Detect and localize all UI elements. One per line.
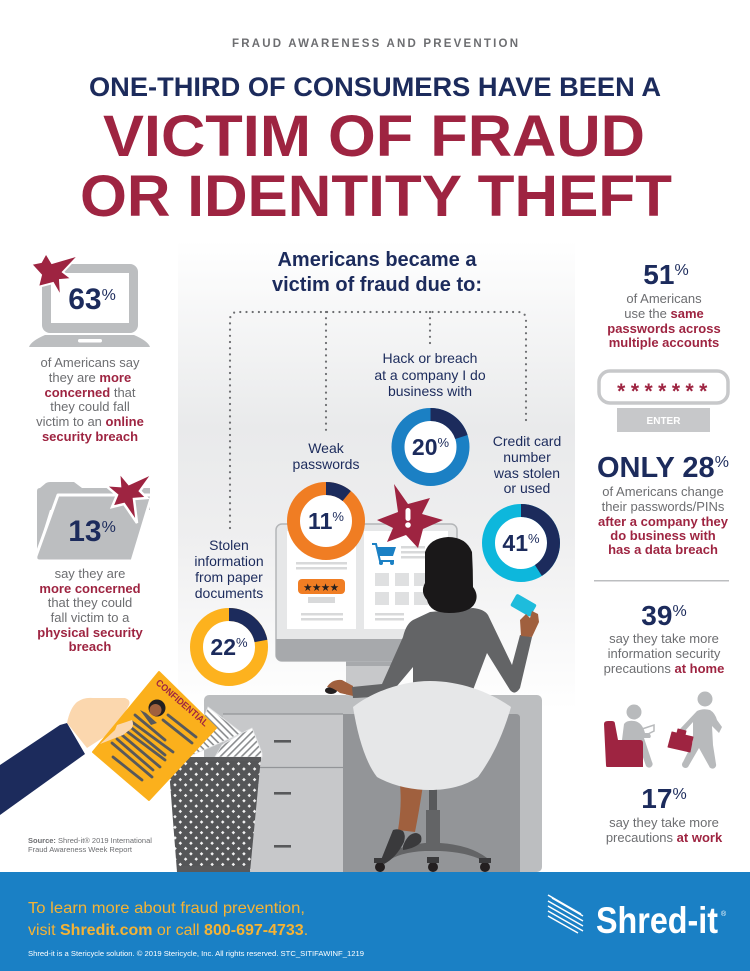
- text: same passwords: passwords across: [607, 321, 721, 336]
- photo: [140, 700, 166, 725]
- text: source: Fraud Awareness Week Report: [28, 845, 133, 854]
- logo: Shred-it: Shred-it: [596, 900, 718, 941]
- text: physical concern: say they are: [55, 566, 125, 581]
- text: online concern: of Americans say: [40, 355, 140, 370]
- icon: star on laptop: [31, 253, 79, 297]
- stat: only 28%: ONLY 28: [597, 452, 715, 484]
- label: stolen info: from paper: [195, 569, 263, 585]
- illustration: confidential document: [93, 672, 216, 800]
- stat: only 28%: %: [715, 454, 729, 471]
- screen: login page: ★★★★: [304, 582, 339, 592]
- hair: [423, 537, 477, 613]
- text: at home: say they take more: [609, 631, 719, 646]
- text: physical concern: breach: [69, 639, 111, 654]
- text lines: [112, 715, 196, 780]
- text: online concern: victim to an online: [36, 414, 144, 429]
- screen: login page: [287, 531, 356, 629]
- text: online concern: security breach: [42, 429, 138, 444]
- papers: [188, 707, 242, 757]
- title: [80, 72, 672, 229]
- donut: credit card: 41: [502, 530, 528, 556]
- text: online concern: concerned that: [44, 385, 136, 400]
- icon: enter button: ENTER: [647, 416, 681, 427]
- title: OR IDENTITY THEFT: [80, 164, 672, 229]
- label: weak passwords: passwords: [293, 456, 359, 472]
- heading: Americans became a victim: victim of fraud due to:: [272, 274, 482, 296]
- stat: 13%: 13: [68, 515, 102, 548]
- text: change passwords: of Americans change: [602, 484, 724, 499]
- donut: hack or breach: [398, 414, 463, 480]
- illustration: desk: [204, 695, 542, 872]
- title: VICTIM OF FRAUD: [103, 104, 645, 169]
- panel: right stats: [594, 259, 729, 845]
- donut: hack or breach: 20: [412, 434, 438, 460]
- mouse hand: [325, 680, 353, 696]
- donut: weak passwords: 11: [308, 508, 332, 534]
- label: stolen info: information: [194, 553, 264, 569]
- screen: shopping page: [364, 531, 448, 629]
- text: change passwords: after a company they: [598, 514, 729, 529]
- stat: 39%: %: [672, 603, 687, 620]
- illustration: woman at desk: [325, 537, 539, 710]
- stat: 63%: %: [102, 287, 116, 304]
- eyebrow heading: FRAUD AWARENESS AND PREVENTION: [232, 38, 518, 50]
- footer call to action: To learn more about fraud prevention,: [28, 900, 305, 917]
- text: source: Source: Shred-it® 2019 International: [28, 836, 152, 845]
- text: change passwords: do business with: [610, 528, 716, 543]
- icon: star on folder: [105, 472, 153, 523]
- donut: weak passwords: %: [332, 509, 344, 524]
- logo: Shred-it: ®: [721, 910, 727, 918]
- text: physical concern: physical security: [37, 625, 144, 640]
- icon: folder: [36, 482, 152, 561]
- text: at home: information security: [608, 646, 721, 661]
- stat: 17%: %: [672, 786, 687, 803]
- label: hack: business with: [388, 383, 472, 399]
- label: stolen info: documents: [195, 585, 263, 601]
- confidential stamp: CONFIDENTIAL: [153, 678, 210, 729]
- holding hand: [520, 611, 539, 637]
- icon: password field: *******: [617, 380, 713, 403]
- footer band: [0, 872, 750, 971]
- text: change passwords: has a data breach: [608, 542, 718, 557]
- torso and arms: [352, 608, 532, 710]
- icon: enter button: [617, 408, 710, 432]
- text: at work: precautions at work: [606, 830, 722, 845]
- text: change passwords: their passwords/PINs: [602, 499, 725, 514]
- label: hack: at a company I do: [374, 367, 486, 383]
- text: physical concern: that they could: [48, 595, 132, 610]
- stat: 51%: %: [674, 262, 689, 279]
- text: at home: precautions at home: [604, 661, 724, 676]
- label: hack: Hack or breach: [383, 350, 477, 366]
- donut: hack or breach: %: [438, 435, 450, 450]
- icon: alert star: [377, 484, 443, 548]
- heading: Americans became a victim: Americans became a: [277, 249, 477, 271]
- icon: laptop: [29, 264, 150, 347]
- text: same passwords: of Americans: [626, 291, 702, 306]
- panel: left stats: [29, 253, 153, 654]
- illustration: thumb: [100, 720, 133, 744]
- stat: 63%: 63: [68, 283, 102, 316]
- icon: password field: [599, 371, 728, 403]
- text: same passwords: use the same: [624, 306, 704, 321]
- stat: 39%: 39: [641, 600, 672, 631]
- donut: stolen paper info: %: [236, 635, 248, 650]
- icon: person reading in armchair: [604, 704, 654, 768]
- text: online concern: they could fall: [50, 399, 130, 414]
- illustration: hand holding document, back part: [0, 698, 130, 815]
- illustration: waste basket: [168, 707, 262, 872]
- text: physical concern: more concerned: [39, 581, 141, 596]
- footer call to action: visit Shredit.com or call 800-697-4733.: [28, 922, 308, 939]
- icon: person walking with briefcase: [668, 692, 722, 769]
- label: credit card: number: [503, 449, 551, 465]
- label: credit card: or used: [504, 480, 550, 496]
- logo: Shred-it: [548, 895, 727, 941]
- label: stolen info: Stolen: [209, 537, 249, 553]
- card: [510, 593, 537, 617]
- stat: 17%: 17: [641, 783, 672, 814]
- donut: credit card: %: [528, 531, 540, 546]
- label: weak passwords: Weak: [308, 440, 345, 456]
- donut: credit card: [488, 510, 554, 576]
- text: at work: say they take more: [609, 815, 719, 830]
- donut: stolen paper info: 22: [210, 634, 236, 660]
- stat: 13%: %: [102, 519, 116, 536]
- title: ONE-THIRD OF CONSUMERS HAVE BEEN A: [89, 72, 661, 102]
- text: same passwords: multiple accounts: [609, 335, 719, 350]
- panel: central background: [178, 240, 575, 710]
- label: credit card: was stolen: [493, 465, 560, 481]
- text: online concern: they are more: [49, 370, 131, 385]
- stat: 51%: 51: [643, 259, 674, 290]
- donut: weak passwords: [294, 488, 358, 554]
- donut: stolen paper info: [196, 614, 262, 680]
- illustration: chair: [353, 681, 511, 872]
- label: credit card: Credit card: [493, 433, 561, 449]
- text: physical concern: fall victim to a: [51, 610, 130, 625]
- icon: cart: [372, 544, 396, 565]
- illustration: monitor: [276, 524, 457, 696]
- dotted connectors: [230, 312, 526, 528]
- footer legal: Shred-it is a Stericycle solution. © 2019 Stericycle, Inc. All rights reserved. STC_SITIFAWINF_1219: [28, 950, 364, 958]
